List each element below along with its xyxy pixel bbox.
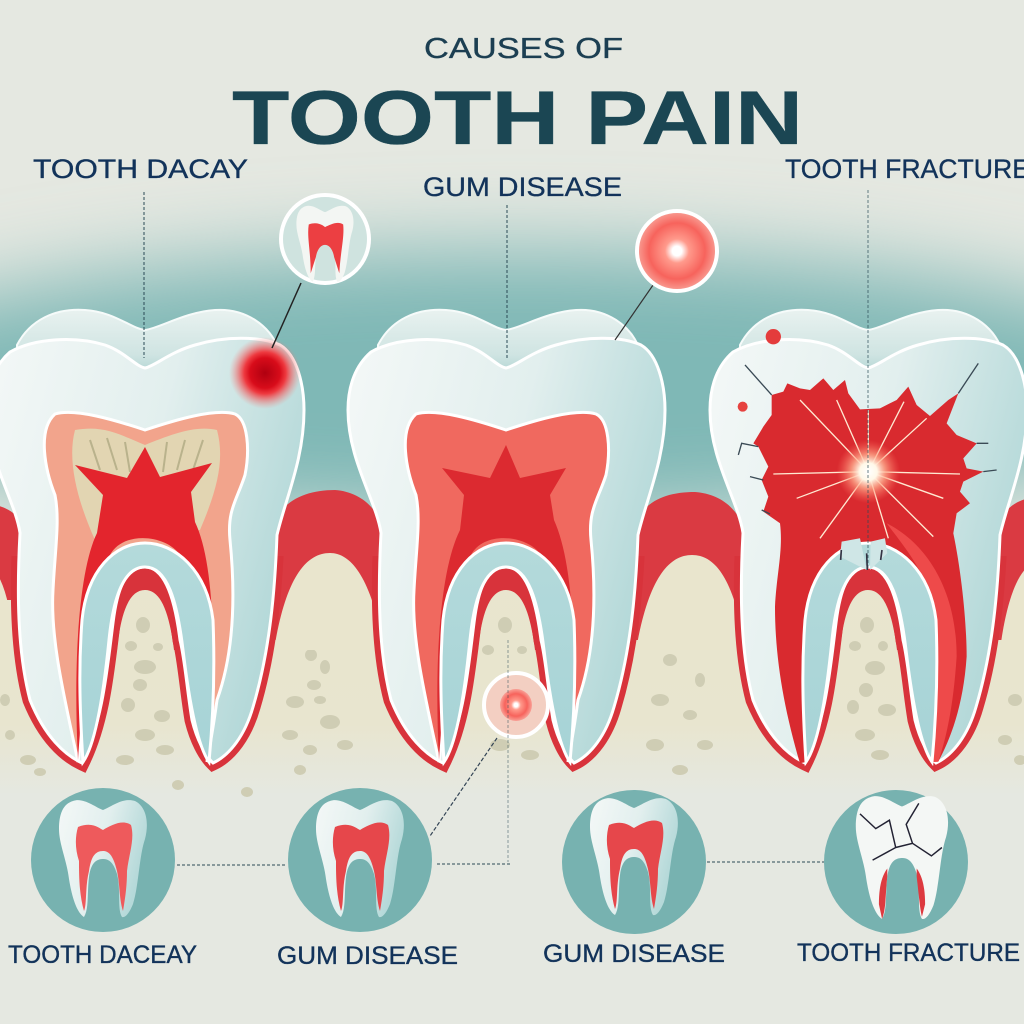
title: CAUSES OF xyxy=(424,33,623,65)
leader lines xyxy=(144,190,868,865)
tooth: gum disease xyxy=(348,310,665,763)
teal glow backdrop xyxy=(0,250,1024,520)
fracture dentine xyxy=(803,543,937,762)
title xyxy=(232,33,803,161)
bone band xyxy=(0,545,1024,795)
label: tooth decay top: TOOTH DACAY xyxy=(33,154,248,184)
label: gum disease top: GUM DISEASE xyxy=(423,172,622,202)
bone pores xyxy=(0,570,1024,797)
fracture details xyxy=(738,329,960,570)
label: tooth decay bottom: TOOTH DACEAY xyxy=(8,941,197,969)
tooth: fracture xyxy=(710,310,1024,763)
label: tooth fracture bottom: TOOTH FRACTURE xyxy=(797,939,1020,967)
pulp chamber xyxy=(44,412,248,762)
starburst xyxy=(773,400,960,538)
title: TOOTH PAIN xyxy=(232,76,803,161)
gum tissue xyxy=(0,490,1024,650)
label: gum disease bottom 2: GUM DISEASE xyxy=(543,940,725,968)
label: gum disease bottom 1: GUM DISEASE xyxy=(277,942,458,970)
thin cracks xyxy=(738,363,997,514)
fracture cavity xyxy=(738,363,997,763)
tooth: decay xyxy=(0,310,304,763)
callout: gum disease xyxy=(615,211,717,340)
decay spot xyxy=(229,337,301,409)
callout: root xyxy=(430,673,548,836)
circle icon: tooth fracture xyxy=(824,790,968,934)
fracture chips xyxy=(766,329,781,344)
circle icon: tooth decay xyxy=(31,788,175,932)
circle icon: gum disease xyxy=(288,788,432,932)
pulp chamber xyxy=(405,412,609,762)
callout: decay xyxy=(272,195,369,348)
circle icon: gum disease 2 xyxy=(562,790,706,934)
